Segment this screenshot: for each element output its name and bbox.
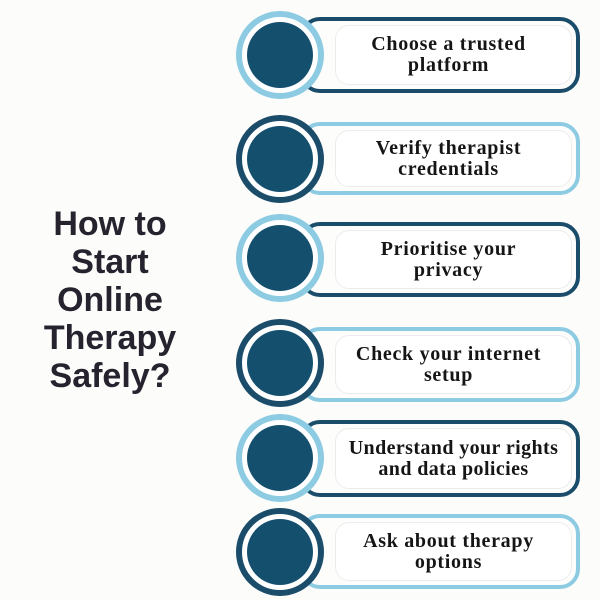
step 5: Understand your rights	[349, 436, 558, 458]
title: Therapy	[44, 319, 176, 357]
step 6	[236, 508, 580, 596]
step 1: Choose a trusted	[371, 33, 526, 55]
step 6: options	[415, 550, 482, 572]
step 4: Check your internet	[356, 342, 541, 364]
title: Start	[71, 243, 149, 281]
title: Online	[57, 281, 163, 319]
title	[44, 205, 176, 395]
step 4	[236, 319, 580, 407]
step 4: setup	[424, 364, 473, 386]
step 1: platform	[408, 54, 489, 76]
step 6: Ask about therapy	[363, 530, 534, 552]
step 2: Verify therapist	[376, 136, 521, 158]
title: Safely?	[50, 357, 170, 395]
step 3: Prioritise your	[381, 238, 516, 260]
step 3: privacy	[414, 258, 483, 280]
step 1	[236, 11, 580, 99]
step 3	[236, 214, 580, 302]
step 5	[236, 414, 580, 502]
step 2: credentials	[398, 158, 499, 180]
step 2	[236, 115, 580, 203]
title: How to	[53, 205, 167, 243]
step 5: and data policies	[378, 458, 529, 480]
